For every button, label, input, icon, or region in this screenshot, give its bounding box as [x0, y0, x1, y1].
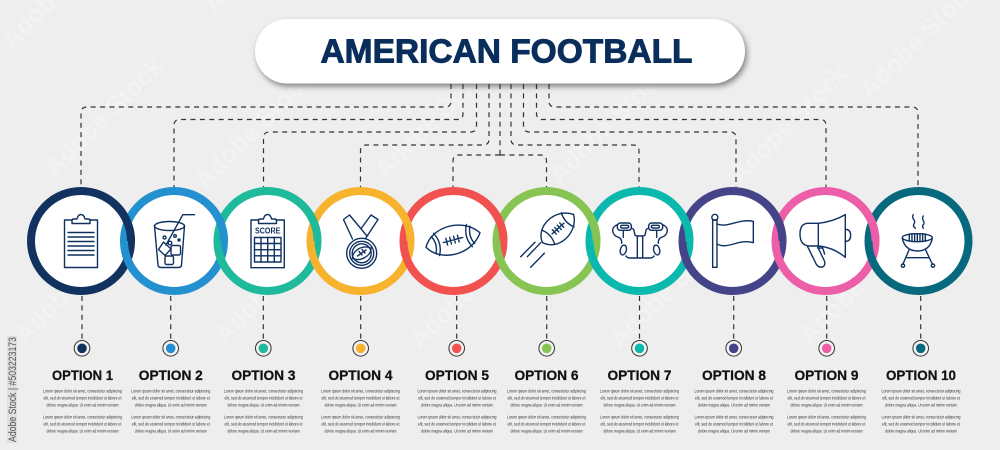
text block: option 9: elit, sed do eiusmod tempor incididunt ut labore et: [788, 421, 866, 426]
text: Adobe Stock: [543, 58, 674, 189]
text block: option 4: dolore magna aliqua. Ut enim ad minim veniam: [324, 402, 397, 408]
text block: option 4: dolore magna aliqua. Ut enim ad minim veniam: [324, 428, 397, 433]
icon: flying football: [521, 205, 582, 267]
text block: option 10: [882, 368, 961, 433]
text block: option 9: [787, 368, 867, 433]
text block: option 4: elit, sed do eiusmod tempor incididunt ut labore et: [322, 421, 400, 426]
marker dot: option 8: [726, 340, 742, 356]
stock image id side label: Adobe Stock | #503223173: [7, 337, 19, 442]
text block: option 5: Lorem ipsum dolor sit amet, consectetur adipiscing: [418, 388, 497, 394]
text: Adobe Stock: [403, 223, 534, 354]
text block: option 7: elit, sed do eiusmod tempor incididunt ut labore et: [600, 421, 679, 426]
text block: option 2: Lorem ipsum dolor sit amet, consectetur adipiscing: [131, 388, 211, 394]
text block: option 2: elit, sed do eiusmod tempor incididunt ut labore et: [132, 421, 210, 426]
text block: option 2: elit, sed do eiusmod tempor incididunt ut labore et: [132, 396, 210, 400]
text block: option 2: dolore magna aliqua. Ut enim ad minim veniam: [135, 428, 207, 433]
text block: option 4: OPTION 4: [328, 368, 393, 383]
text block: option 9: dolore magna aliqua. Ut enim ad minim veniam: [790, 428, 863, 433]
text block: option 3: dolore magna aliqua. Ut enim ad minim veniam: [228, 402, 300, 408]
text block: option 10: elit, sed do eiusmod tempor incididunt ut labore et: [882, 396, 961, 400]
text block: option 7: elit, sed do eiusmod tempor incididunt ut labore et: [600, 396, 679, 400]
text block: option 1: dolore magna aliqua. Ut enim ad minim veniam: [46, 402, 119, 408]
icon: american football: [422, 219, 484, 261]
marker dot: option 9: [819, 340, 834, 356]
icon: score board: [251, 214, 284, 268]
marker dot: option 5: [449, 340, 465, 356]
title: AMERICAN FOOTBALL: [320, 34, 692, 71]
text block: option 1: OPTION 1: [52, 368, 113, 383]
text block: option 10: elit, sed do eiusmod tempor incididunt ut labore et: [882, 421, 961, 426]
text block: option 5: OPTION 5: [425, 368, 489, 383]
text block: option 2: OPTION 2: [139, 368, 203, 383]
text block: option 8: dolore magna aliqua. Ut enim ad minim veniam: [698, 428, 770, 433]
text block: option 7: OPTION 7: [608, 368, 672, 383]
interlocking coloured rings: [31, 191, 968, 291]
text: Adobe Stock: [603, 223, 734, 354]
text block: option 8: elit, sed do eiusmod tempor incididunt ut labore et: [695, 396, 774, 400]
text block: option 1: elit, sed do eiusmod tempor incididunt ut labore et: [44, 421, 122, 426]
text block: option 3: OPTION 3: [232, 368, 296, 383]
text block: option 9: Lorem ipsum dolor sit amet, consectetur adipiscing: [787, 388, 867, 394]
text block: option 9: elit, sed do eiusmod tempor incididunt ut labore et: [788, 396, 866, 400]
icon: megaphone: [800, 215, 851, 267]
text block: option 3: Lorem ipsum dolor sit amet, consectetur adipiscing: [224, 388, 304, 394]
text: Adobe Stock: [368, 53, 499, 184]
text block: option 8: Lorem ipsum dolor sit amet, consectetur adipiscing: [694, 414, 774, 419]
text block: option 5: Lorem ipsum dolor sit amet, consectetur adipiscing: [418, 414, 497, 419]
text block: option 6: OPTION 6: [514, 368, 579, 383]
text block: option 10: dolore magna aliqua. Ut enim ad minim veniam: [885, 402, 957, 408]
icon: shoulder pads: [613, 223, 667, 258]
text block: option 4: Lorem ipsum dolor sit amet, consectetur adipiscing: [321, 414, 401, 419]
text block: option 8: [694, 368, 774, 433]
text block: option 9: dolore magna aliqua. Ut enim ad minim veniam: [790, 402, 863, 408]
text block: option 3: [224, 368, 304, 433]
text: Adobe Stock: [793, 218, 924, 349]
text block: option 5: elit, sed do eiusmod tempor incididunt ut labore et: [418, 421, 497, 426]
text block: option 7: dolore magna aliqua. Ut enim ad minim veniam: [604, 402, 676, 408]
text block: option 9: OPTION 9: [794, 368, 859, 383]
marker dot: option 7: [632, 340, 647, 356]
marker dot: option 2: [163, 340, 178, 356]
text block: option 6: [507, 368, 587, 433]
text block: option 10: Lorem ipsum dolor sit amet, consectetur adipiscing: [882, 414, 961, 419]
text: Adobe Stock: [723, 58, 854, 189]
text: Adobe Stock: [188, 63, 319, 194]
text block: option 2: dolore magna aliqua. Ut enim ad minim veniam: [135, 402, 207, 408]
text block: option 7: [600, 368, 680, 433]
text: Adobe Stock: [208, 218, 339, 349]
text block: option 8: OPTION 8: [702, 368, 766, 383]
text block: option 10: dolore magna aliqua. Ut enim ad minim veniam: [885, 428, 957, 433]
text block: option 5: dolore magna aliqua. Ut enim ad minim veniam: [421, 402, 493, 408]
text: Adobe Stock: [38, 51, 169, 182]
text block: option 2: Lorem ipsum dolor sit amet, consectetur adipiscing: [131, 414, 211, 419]
text block: option 6: dolore magna aliqua. Ut enim ad minim veniam: [510, 402, 583, 408]
icon: flag: [712, 214, 753, 267]
icon: barbecue grill: [901, 215, 935, 267]
text block: option 8: dolore magna aliqua. Ut enim ad minim veniam: [698, 402, 770, 408]
text block: option 6: Lorem ipsum dolor sit amet, consectetur adipiscing: [507, 414, 587, 419]
text block: option 1: Lorem ipsum dolor sit amet, consectetur adipiscing: [43, 388, 123, 394]
text block: option 1: dolore magna aliqua. Ut enim ad minim veniam: [46, 428, 119, 433]
text block: option 7: Lorem ipsum dolor sit amet, consectetur adipiscing: [600, 388, 680, 394]
marker dot: option 6: [539, 340, 554, 356]
dashed connectors from circles to dots: [82, 296, 921, 340]
text block: option 10: Lorem ipsum dolor sit amet, consectetur adipiscing: [882, 388, 961, 394]
text block: option 3: dolore magna aliqua. Ut enim ad minim veniam: [228, 428, 300, 433]
text: Adobe Stock: [8, 218, 139, 349]
text block: option 4: Lorem ipsum dolor sit amet, consectetur adipiscing: [321, 388, 401, 394]
text block: option 6: Lorem ipsum dolor sit amet, consectetur adipiscing: [507, 388, 587, 394]
icon: iced drink: [154, 215, 194, 268]
text block: option 6: dolore magna aliqua. Ut enim ad minim veniam: [510, 428, 583, 433]
text block: option 5: [418, 368, 497, 433]
icon: clipboard: [64, 214, 98, 268]
text block: option 9: Lorem ipsum dolor sit amet, consectetur adipiscing: [787, 414, 867, 419]
text block: option 3: Lorem ipsum dolor sit amet, consectetur adipiscing: [224, 414, 304, 419]
text block: option 1: [43, 368, 123, 433]
text block: option 3: elit, sed do eiusmod tempor incididunt ut labore et: [224, 421, 303, 426]
text block: option 2: [131, 368, 211, 433]
title pill: [255, 19, 745, 84]
text block: option 4: elit, sed do eiusmod tempor incididunt ut labore et: [322, 396, 400, 400]
text block: option 7: Lorem ipsum dolor sit amet, consectetur adipiscing: [600, 414, 680, 419]
text block: option 8: Lorem ipsum dolor sit amet, consectetur adipiscing: [694, 388, 774, 394]
text block: option 6: elit, sed do eiusmod tempor incididunt ut labore et: [508, 421, 586, 426]
white circle discs: [31, 191, 968, 291]
text block: option 5: dolore magna aliqua. Ut enim ad minim veniam: [421, 428, 493, 433]
icon: football medal: [344, 215, 378, 268]
text block: option 6: elit, sed do eiusmod tempor incididunt ut labore et: [508, 396, 586, 400]
text block: option 7: dolore magna aliqua. Ut enim ad minim veniam: [604, 428, 676, 433]
text block: option 4: [321, 368, 401, 433]
text block: option 3: elit, sed do eiusmod tempor incididunt ut labore et: [224, 396, 303, 400]
text block: option 1: Lorem ipsum dolor sit amet, consectetur adipiscing: [43, 414, 123, 419]
text block: option 5: elit, sed do eiusmod tempor incididunt ut labore et: [418, 396, 497, 400]
text block: option 8: elit, sed do eiusmod tempor incididunt ut labore et: [695, 421, 774, 426]
icon: score board: SCORE: [255, 225, 281, 235]
marker dot: option 10: [913, 340, 928, 356]
marker dot: option 1: [74, 340, 90, 356]
text block: option 10: OPTION 10: [886, 368, 956, 383]
dashed connectors from title to circles: [81, 84, 918, 187]
marker dot: option 3: [255, 340, 271, 356]
text block: option 1: elit, sed do eiusmod tempor incididunt ut labore et: [44, 396, 122, 400]
marker dot: option 4: [353, 340, 369, 356]
